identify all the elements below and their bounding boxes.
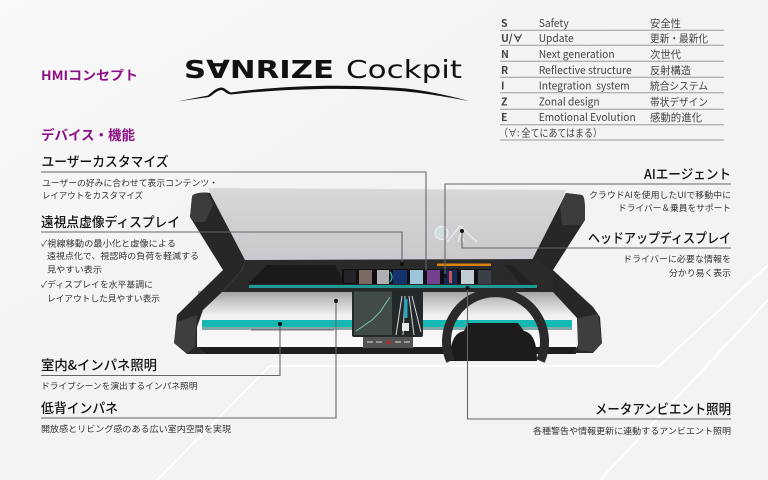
callout: far-focus virtual image display: レイアウトした見やすい表示	[47, 292, 160, 304]
upper teal strip	[249, 285, 537, 288]
display strip	[342, 269, 491, 284]
table: SUNRIZE key: I	[501, 78, 504, 94]
callout: far-focus virtual image display: ✓視線移動の最小化と虚像による	[41, 236, 176, 250]
table: SUNRIZE key: Integration system	[539, 78, 630, 94]
right pillar	[532, 193, 602, 353]
table: SUNRIZE key: S	[501, 16, 508, 31]
table: SUNRIZE key: 帯状デザイン	[650, 94, 708, 110]
table: SUNRIZE key: Safety	[539, 16, 569, 31]
table: SUNRIZE key: Zonal design	[539, 94, 600, 110]
callout: far-focus virtual image display: 遠視点化で、視認時の負荷を軽減する	[47, 249, 199, 262]
right pillar highlights	[560, 193, 585, 225]
table: SUNRIZE key: R	[501, 63, 508, 78]
callout: meter ambient lighting: 各種警告や情報更新に連動するアンビエント照明	[533, 424, 731, 437]
callout: head-up display: ヘッドアップディスプレイ	[588, 227, 731, 247]
left pillar highlights	[190, 193, 213, 222]
table: SUNRIZE key: 安全性	[650, 16, 681, 31]
orange bar	[437, 264, 491, 266]
callout: far-focus virtual image display: ✓ディスプレイを水平基調に	[41, 278, 153, 290]
table: SUNRIZE key: （∀: 全てにあてはまる）	[499, 126, 602, 140]
callout: head-up display	[460, 227, 731, 279]
windshield glass	[208, 188, 566, 262]
callout: head-up display: ドライバーに必要な情報を	[623, 252, 731, 265]
callout: meter ambient lighting	[466, 286, 731, 437]
table: SUNRIZE key: Next generation	[539, 47, 615, 62]
callout: interior and panel lighting: 室内&インパネ照明	[41, 354, 157, 374]
logo: SANRIZE Cockpit: S∀NRIZE	[184, 55, 334, 84]
callout: user customize: ユーザーの好みに合わせて表示コンテンツ・	[42, 176, 218, 189]
left pillar	[174, 193, 245, 354]
callout: user customize	[41, 150, 426, 271]
table: SUNRIZE key: 次世代	[650, 47, 681, 62]
ambient teal strip	[202, 320, 572, 330]
callout: far-focus virtual image display: 見やすい表示	[47, 262, 102, 276]
table: SUNRIZE key	[499, 16, 724, 140]
callout: AI agent: AIエージェント	[644, 163, 731, 183]
illustration: cockpit dashboard	[174, 188, 602, 361]
callout: head-up display: 分かり易く表示	[669, 266, 731, 279]
table: SUNRIZE key: 感動的進化	[650, 110, 702, 125]
callout: AI agent	[443, 163, 731, 278]
callout: far-focus virtual image display	[41, 211, 404, 304]
callout: interior and panel lighting: ドライブシーンを演出するインパネ照明	[41, 379, 198, 392]
table: SUNRIZE key: U/∀	[501, 31, 523, 46]
heading: HMI concept: HMIコンセプト	[41, 65, 138, 84]
center touch screen	[352, 290, 423, 348]
logo: SANRIZE Cockpit	[177, 55, 469, 102]
callout: low-profile panel	[41, 299, 338, 435]
table: SUNRIZE key: 更新・最新化	[650, 31, 708, 46]
logo: SANRIZE Cockpit: Cockpit	[346, 55, 462, 84]
callout: far-focus virtual image display: 遠視点虚像ディスプレイ	[41, 211, 180, 231]
lower band	[197, 347, 576, 354]
steering wheel	[446, 293, 544, 361]
callout: interior and panel lighting	[41, 322, 282, 392]
table: SUNRIZE key: 統合システム	[650, 78, 708, 94]
table: SUNRIZE key: E	[501, 110, 507, 125]
callout: user customize: ユーザーカスタマイズ	[42, 150, 168, 170]
upper dash panel	[222, 259, 553, 292]
dashboard body	[198, 291, 576, 350]
callout: low-profile panel: 開放感とリビング感のある広い室内空間を実現	[41, 422, 231, 435]
callout: meter ambient lighting: メータアンビエント照明	[595, 398, 731, 418]
callout: AI agent: ドライバー＆乗員をサポート	[618, 201, 731, 214]
table: SUNRIZE key: Z	[501, 94, 507, 110]
heading: devices and functions: デバイス・機能	[41, 124, 135, 144]
callout: user customize: レイアウトをカスタマイズ	[42, 188, 143, 202]
table: SUNRIZE key: 反射構造	[650, 63, 691, 78]
table: SUNRIZE key: Emotional Evolution	[539, 110, 636, 125]
table: SUNRIZE key: Reflective structure	[539, 63, 632, 78]
table: SUNRIZE key: Update	[539, 31, 574, 46]
callout: AI agent: クラウドAIを使用したUIで移動中に	[589, 188, 731, 201]
callout: low-profile panel: 低背インパネ	[41, 397, 118, 417]
table: SUNRIZE key: N	[501, 47, 509, 62]
HUD graphic	[435, 226, 477, 242]
